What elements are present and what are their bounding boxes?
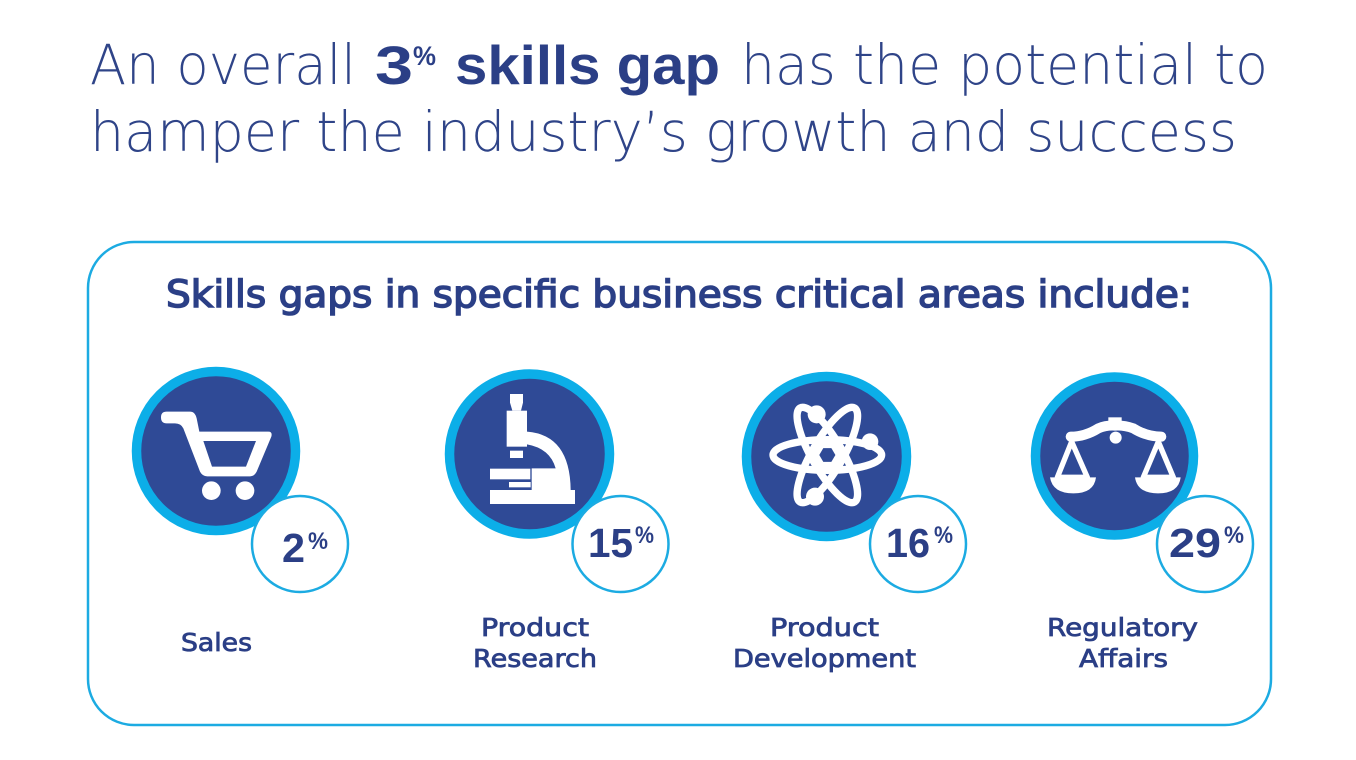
percent bubble: 16%: % xyxy=(934,522,953,549)
percent bubble: 15% xyxy=(572,496,668,592)
label: product research xyxy=(473,613,597,673)
icon: microscope xyxy=(450,374,610,534)
percent bubble: 15%: 15 xyxy=(588,520,633,566)
icon: atom xyxy=(746,376,906,536)
percent bubble: 29%: % xyxy=(1224,522,1244,549)
label: product development xyxy=(733,613,916,673)
icon: scales xyxy=(1036,377,1194,535)
label: regulatory affairs: Regulatory xyxy=(1047,613,1198,642)
item: product development xyxy=(733,376,966,673)
label: product research: Research xyxy=(473,644,597,673)
title: An overall xyxy=(90,33,356,97)
percent bubble: 16% xyxy=(870,496,966,592)
title: 3 xyxy=(375,36,413,96)
label: regulatory affairs xyxy=(1047,613,1198,673)
title: has the potential to xyxy=(741,33,1268,97)
label: product research: Product xyxy=(481,613,589,642)
label: product development: Development xyxy=(733,644,916,673)
panel: skills gaps xyxy=(88,242,1271,725)
percent bubble: 29%: 29 xyxy=(1169,520,1221,566)
icon: shopping cart xyxy=(136,372,296,530)
title: skills gap xyxy=(455,34,720,96)
label: regulatory affairs: Affairs xyxy=(1079,644,1168,673)
title xyxy=(90,33,1268,164)
percent bubble: 15%: % xyxy=(635,522,654,549)
percent bubble: 2%: % xyxy=(308,528,328,555)
panel heading: Skills gaps in specific business critical areas include: xyxy=(166,273,1192,316)
label: product development: Product xyxy=(770,613,879,642)
percent bubble: 29% xyxy=(1157,496,1253,592)
item: product research xyxy=(450,374,668,673)
percent bubble: 16%: 16 xyxy=(886,520,930,566)
label: sales: Sales xyxy=(181,628,252,657)
title: % xyxy=(413,41,436,71)
percent bubble: 2%: 2 xyxy=(282,525,305,571)
item: sales xyxy=(136,372,348,657)
percent bubble: 2% xyxy=(252,496,348,592)
title: hamper the industry’s growth and success xyxy=(90,100,1237,164)
item: regulatory affairs xyxy=(1036,377,1253,673)
